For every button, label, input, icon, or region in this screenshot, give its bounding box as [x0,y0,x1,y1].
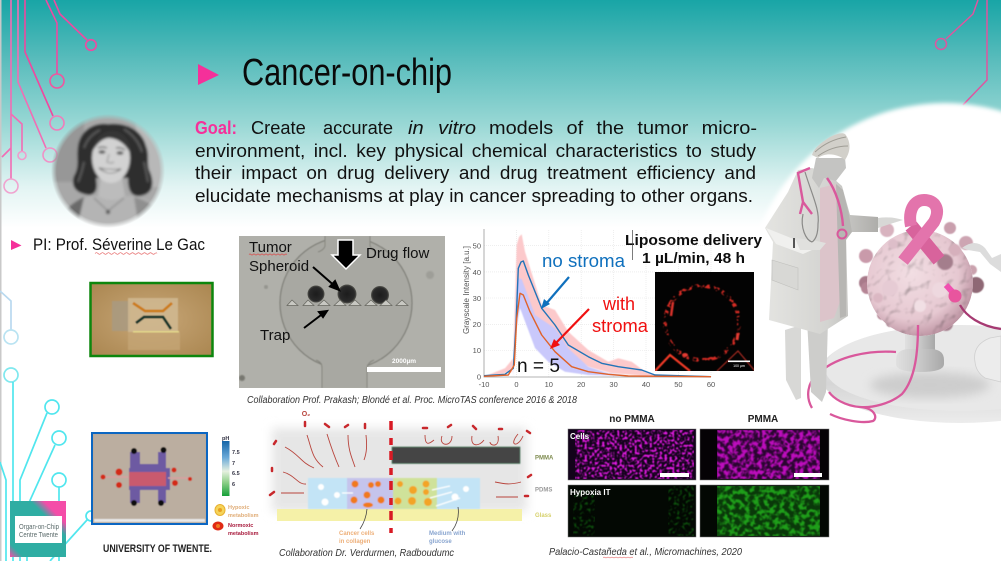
axis tick labels: 20 [473,320,481,329]
schematic labels: Cancer cells [339,531,375,537]
stethoscope knob and tubes [808,285,1001,422]
liposome delivery heading: Liposome delivery [625,232,763,249]
caption: Prakash collaboration: Collaboration Prof. Prakash; Blondé et al. Proc. MicroTAS conference 2016 & 2018 [247,395,577,406]
goal text block: Goal: [195,118,237,138]
axis tick labels: 40 [473,268,481,277]
culture channels [308,478,480,509]
micrograph: cells, no PMMA: Cells [570,432,590,441]
axis tick labels: -10 [479,380,489,389]
axis tick labels: 30 [473,294,481,303]
metabolism legend: metabolism [228,531,259,537]
goal text block: their impact on drug delivery and drug treatment efficiency and [195,163,756,183]
schematic labels: Glass [535,513,552,519]
photo: spheroid trap chamber micrograph: Trap [260,327,290,344]
portrait of the principal investigator [52,115,164,228]
micrograph: hypoxia, no PMMA: Hypoxia IT [570,488,611,497]
caption: Palacio-Castañeda reference: Palacio-Castañeda et al., Micromachines, 2020 [549,547,742,558]
no stroma label and arrow [541,251,626,309]
platform [819,325,1001,423]
red divider line [389,421,393,533]
caption: Verdurmen collaboration: Collaboration Dr. Verdurmen, Radboudumc [279,548,454,559]
metabolism legend: Hypoxic [228,505,249,511]
micrograph: hypoxia, no PMMA [568,485,696,537]
pH colour scale legend: 6 [232,482,235,488]
sample size: n = 5 [517,356,560,377]
with stroma label and arrow: with [602,294,635,314]
axis tick labels: 60 [707,380,715,389]
schematic labels: PDMS [535,488,552,494]
confocal image of liposome ring [655,272,755,371]
no stroma uncertainty band [488,234,655,377]
cell with bumps [859,222,984,336]
goal text block: environment, incl. key physical chemical characteristics to study [195,141,756,161]
photo: chip device with green frame [90,283,212,356]
pH colour scale legend: 6.5 [232,471,240,477]
axis tick labels: 0 [514,380,518,389]
second hand and arm at right [962,243,1001,382]
schematic labels: glucose [429,539,452,545]
no stroma curve [484,261,711,377]
goal text block: Create accurate [251,118,393,138]
Organ-on-Chip Centre Twente logo [10,501,66,557]
panel: fluorescence microscopy, no PMMA vs PMMA [563,409,829,540]
drug flow arrow [332,240,360,269]
scale bar [367,367,441,372]
with stroma label and arrow: stroma [592,316,649,336]
with stroma label and arrow [550,294,649,349]
liposome delivery heading [625,230,763,267]
pH colour scale legend: pH [222,436,229,442]
spheroid label arrow [313,267,339,290]
white background circle behind illustration [745,103,1001,503]
goal text block: elucidate mechanisms at play in cancer spreading to other organs. [195,186,753,206]
micrograph: hypoxia, PMMA [700,485,829,537]
axis tick labels: 30 [609,380,618,389]
panel: fluorescence microscopy, no PMMA vs PMMA: no PMMA [609,414,655,425]
with stroma curve [484,293,711,377]
doctor figure [765,133,903,402]
no stroma label and arrow: no stroma [542,251,626,271]
metabolism legend [212,504,259,537]
pH colour scale legend: 7 [232,461,235,467]
micrograph: cells, no PMMA [568,429,696,480]
Organ-on-Chip Centre Twente logo: Organ-on-Chip [19,524,59,531]
title with arrow marker: Cancer-on-chip [242,52,452,94]
slide background gradient [0,0,1001,228]
schematic labels: in collagen [339,539,371,545]
photo: spheroid trap chamber micrograph: Spheroid [249,258,309,275]
oxygen molecules and diffusion arrows [281,434,523,497]
photo: chip with pH indicator, blue frame [92,433,207,524]
goal text block [195,118,757,206]
axis tick labels [462,242,715,389]
axis tick labels: 50 [473,242,481,250]
axis tick labels: 10 [473,346,481,355]
illustration: doctor examining a tumour cell [765,133,1001,423]
confocal image of liposome ring: 100 µm [733,364,745,368]
with stroma uncertainty band [513,278,630,376]
awareness ribbon [903,200,939,261]
schematic: cancer cells in PDMS chip with and without PMMA: O₂ [302,411,310,418]
photo: spheroid trap chamber micrograph: 2000µm [392,358,416,365]
PI name line: PI: Prof. Séverine Le Gac [33,235,205,254]
pink circuit traces, top left [2,0,96,193]
axis tick labels: 50 [674,380,683,389]
metabolism legend: metabolism [228,513,259,519]
pink circuit traces, top right [936,0,987,105]
axis tick labels: 10 [545,380,553,389]
goal text block: models of the tumor micro- [489,118,757,138]
axis tick labels: 20 [577,380,585,389]
photo: spheroid trap chamber micrograph: Tumor [249,239,292,256]
schematic: cancer cells in PDMS chip with and without PMMA [270,411,554,545]
liposome delivery heading: 1 µL/min, 48 h [642,250,745,267]
axis tick labels: 40 [642,380,650,389]
line chart: grayscale intensity over distance [462,229,715,389]
schematic labels [339,456,554,545]
goal text block: in vitro [408,118,476,138]
pH colour scale legend [222,436,240,496]
title with arrow marker [198,52,452,94]
panel: fluorescence microscopy, no PMMA vs PMMA: PMMA [748,414,778,425]
photo: spheroid trap chamber micrograph [239,236,445,388]
schematic labels: Medium with [429,531,466,537]
metabolism legend: Normoxic [228,523,253,529]
axis tick labels: Grayscale Intensity [a.u.] [462,246,471,334]
schematic labels: PMMA [535,456,554,462]
photo: spheroid trap chamber micrograph: Drug flow [366,245,430,262]
University of Twente wordmark: UNIVERSITY OF TWENTE. [103,543,212,555]
Organ-on-Chip Centre Twente logo: Centre Twente [19,532,58,539]
blue circuit traces, lower left [0,291,96,561]
micrograph: cells, PMMA [700,429,829,480]
pH colour scale legend: 7.5 [232,450,240,456]
axis tick labels: 0 [477,372,481,382]
trap label arrow [304,311,327,328]
